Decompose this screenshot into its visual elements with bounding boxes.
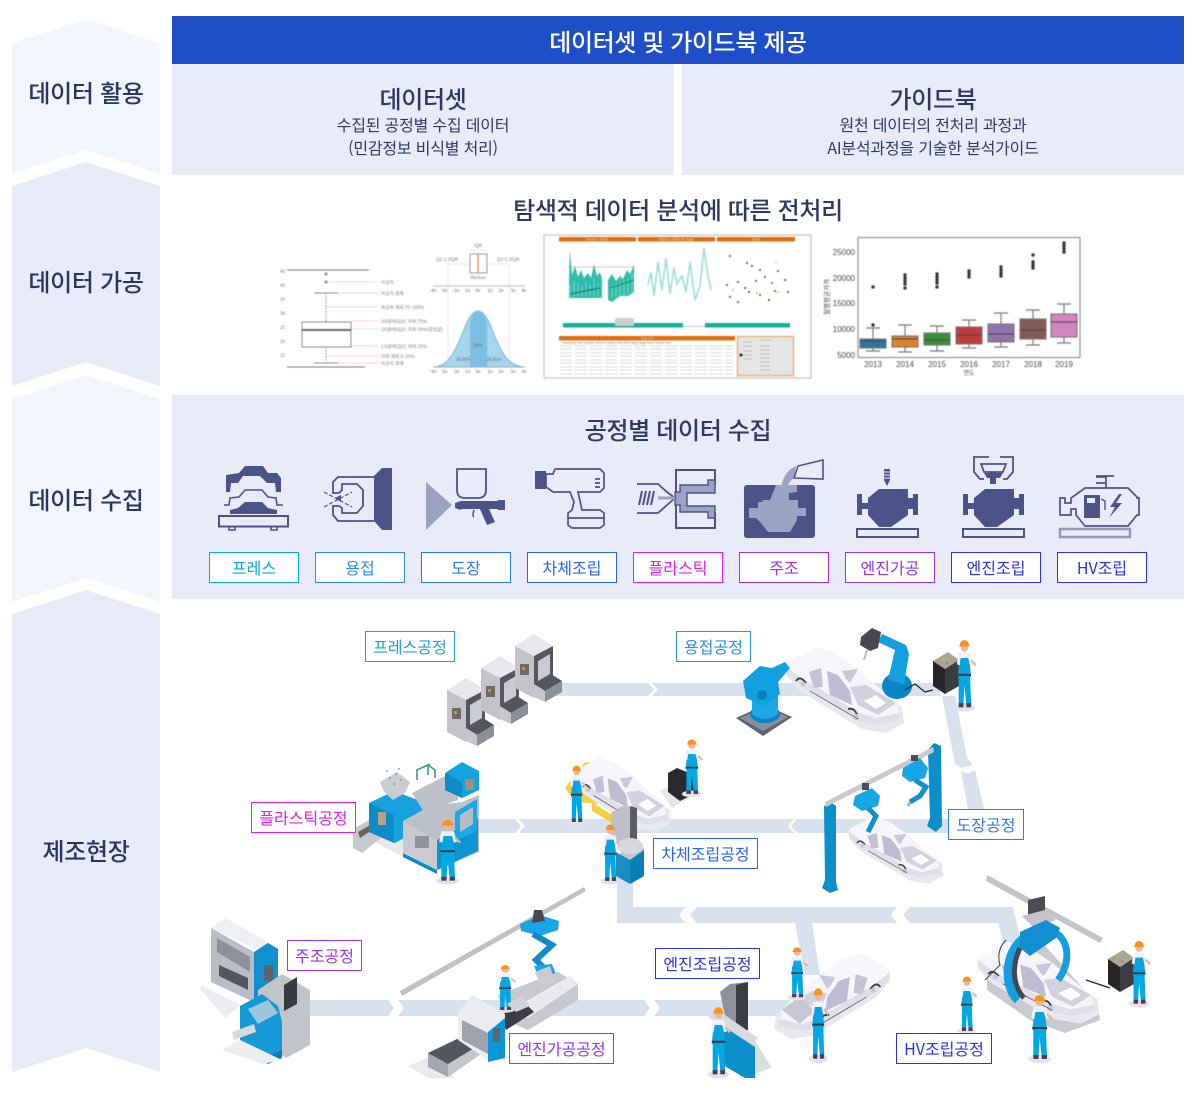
chart: box plot and normal distribution explanation: 하위 계위 0~25% xyxy=(381,353,416,360)
machine: painting gantry xyxy=(822,743,943,893)
panel: 데이터셋: 수집된 공정별 수집 데이터 xyxy=(337,112,509,136)
label: 용접 xyxy=(315,552,405,583)
step: 데이터 활용: 데이터 활용 xyxy=(28,74,144,109)
chart: box plot and normal distribution explanation: Median xyxy=(470,274,486,281)
label: 주조: 주조 xyxy=(769,555,799,579)
chart: box plot and normal distribution explanation: 2σ xyxy=(498,369,504,375)
chart: monitoring dashboard: Status xyxy=(752,237,761,241)
label: 플라스틱 xyxy=(633,552,723,583)
chart: box plot and normal distribution explanation: 24.65% xyxy=(486,357,502,363)
panel: 가이드북: AI분석과정을 기술한 분석가이드 xyxy=(827,135,1039,159)
label: 엔진가공공정: 엔진가공공정 xyxy=(517,1036,606,1060)
chart: yearly box plot xyxy=(822,236,1082,377)
icon: HV engine xyxy=(1060,476,1139,537)
chart: monitoring dashboard xyxy=(543,234,812,379)
machine: engine machining xyxy=(400,887,586,1078)
panel: 데이터셋: (민감정보 비식별 처리) xyxy=(348,135,498,159)
arrow row: painting to body assembly xyxy=(470,819,948,833)
icon: press xyxy=(219,466,288,530)
icon: engine assembly xyxy=(963,457,1024,537)
label: 프레스: 프레스 xyxy=(232,555,276,579)
label: 주조공정: 주조공정 xyxy=(295,943,354,967)
machine: injection molding xyxy=(353,762,479,884)
chart: box plot and normal distribution explanation: -2σ xyxy=(453,288,460,294)
heading: 공정별 데이터 수집: 공정별 데이터 수집 xyxy=(585,411,771,446)
step: 데이터 수집: 데이터 수집 xyxy=(28,481,144,516)
label: 엔진조립 xyxy=(951,552,1041,583)
chart: yearly box plot: 15000 xyxy=(833,299,856,308)
step: 데이터 가공: 데이터 가공 xyxy=(28,263,144,298)
chart: yearly box plot: 10000 xyxy=(833,325,856,334)
chart: yearly box plot: 2019 xyxy=(1055,360,1073,369)
chart: yearly box plot: 2017 xyxy=(992,360,1010,369)
chart: box plot and normal distribution explanation: 이상치 경계 xyxy=(381,290,403,297)
chart: box plot and normal distribution explanation: 15 xyxy=(280,353,286,359)
chart: box plot and normal distribution explanation: 24.65% xyxy=(455,357,471,363)
chart: monitoring dashboard: Vibration Status by Stage xyxy=(658,237,694,241)
chart: box plot and normal distribution explanation: -2σ xyxy=(453,369,460,375)
arrow row: press to welding xyxy=(556,683,940,696)
panel: 가이드북: 가이드북 xyxy=(890,80,976,115)
label: HV조립공정: HV조립공정 xyxy=(904,1036,984,1060)
chart: yearly box plot: 2015 xyxy=(928,360,946,369)
chart: box plot and normal distribution explanation: Q1-1.5IQR xyxy=(436,257,458,263)
arrow row: casting to engine xyxy=(300,1000,790,1016)
flow arrows xyxy=(300,683,1022,1016)
chart: box plot and normal distribution explanation: 40 xyxy=(280,283,286,289)
label: 차체조립공정 xyxy=(653,838,758,869)
machine: HV assembly xyxy=(958,875,1150,1063)
icons: process row xyxy=(218,456,1140,538)
chart: box plot and normal distribution explanation: 20 xyxy=(280,339,286,345)
header bar: 데이터셋 및 가이드북 제공 xyxy=(549,23,807,58)
chart: yearly box plot: 연도 xyxy=(963,369,975,377)
header bar xyxy=(172,16,1184,64)
chart: box plot and normal distribution explanation: 1σ xyxy=(487,288,493,294)
label: 엔진가공공정 xyxy=(509,1033,614,1064)
label: HV조립: HV조립 xyxy=(1077,555,1127,579)
label: 엔진가공 xyxy=(845,552,935,583)
chart: yearly box plot: 5000 xyxy=(837,351,856,360)
step: 제조현장 xyxy=(12,590,160,1072)
machine: center assembly xyxy=(601,805,644,884)
label: 차체조립 xyxy=(527,552,617,583)
chart: box plot and normal distribution explanation: 최상위 계위 75~100% xyxy=(381,304,425,311)
machine: welding station xyxy=(736,628,976,736)
step: 데이터 가공 xyxy=(12,162,160,386)
icon: casting xyxy=(744,460,823,538)
chart: box plot and normal distribution explanation: Q3+1.5IQR xyxy=(497,257,519,263)
chart: yearly box plot: 25000 xyxy=(833,248,856,257)
machine: engine assembly xyxy=(708,947,890,1079)
chart: box plot and normal distribution explanation: 1σ xyxy=(487,369,493,375)
chart: yearly box plot: 2018 xyxy=(1024,360,1042,369)
chart: box plot and normal distribution explanation: 4σ xyxy=(521,288,527,294)
chart: box plot and normal distribution explanation: 30 xyxy=(280,311,286,317)
chart: box plot and normal distribution explanation: 2사분위(Q2): 하위 50%(중앙값) xyxy=(381,326,443,333)
panel: 데이터셋: 데이터셋 xyxy=(380,80,466,115)
machine: press cabinets xyxy=(447,634,562,746)
panel: 가이드북: 원천 데이터의 전처리 과정과 xyxy=(839,112,1027,136)
label: 용접공정: 용접공정 xyxy=(684,634,743,658)
chart: box plot and normal distribution explanation: 이상치 xyxy=(381,279,394,286)
chart: box plot and normal distribution explanation: IQR xyxy=(474,243,482,249)
step: 제조현장: 제조현장 xyxy=(42,832,130,867)
label: HV조립공정 xyxy=(896,1033,992,1064)
label: 프레스공정 xyxy=(365,631,455,662)
chart: monitoring dashboard: Timestamp Item number Vehicle number Drive RMS Stage Stage Name Failure code xyxy=(562,341,672,345)
label: 프레스 xyxy=(209,552,299,583)
icon: welding xyxy=(324,468,392,530)
chart: yearly box plot: 2016 xyxy=(960,360,978,369)
chart: box plot and normal distribution explanation: 3사분위(Q3): 하위 75% xyxy=(381,318,428,325)
label: 도장: 도장 xyxy=(451,555,481,579)
chart: box plot and normal distribution explanation: 1사분위(Q1): 하위 25% xyxy=(381,343,428,350)
label: 도장 xyxy=(421,552,511,583)
chart: box plot and normal distribution explanation: 25 xyxy=(280,325,286,331)
arrow: welding to painting xyxy=(942,696,988,826)
label: 엔진가공: 엔진가공 xyxy=(861,555,919,579)
step: 데이터 수집 xyxy=(12,375,160,602)
chart: box plot and normal distribution explanation: -1σ xyxy=(464,288,471,294)
machine: casting xyxy=(201,918,310,1064)
icon: plastic injection xyxy=(637,470,715,528)
label: 도장공정: 도장공정 xyxy=(957,812,1015,836)
chart: monitoring dashboard: Vibration Status xyxy=(586,237,609,241)
chart: box plot and normal distribution explanation: -1σ xyxy=(464,369,471,375)
icon: spray gun xyxy=(426,469,505,530)
heading: 전처리: 탐색적 데이터 분석에 따른 전처리 xyxy=(513,191,843,226)
chart: box plot and normal distribution explanation: 35 xyxy=(280,297,286,303)
chart: box plot and normal distribution explanation: 48 xyxy=(280,269,286,275)
chart: box plot and normal distribution explanation xyxy=(280,242,527,375)
chart: box plot and normal distribution explanation: 0σ xyxy=(475,369,481,375)
icon: engine machining xyxy=(857,469,918,537)
label: 주조 xyxy=(739,552,829,583)
chart: box plot and normal distribution explanation: -3σ xyxy=(441,369,448,375)
chart: yearly box plot: 2014 xyxy=(896,360,914,369)
chart: box plot and normal distribution explanation: 3σ xyxy=(510,288,516,294)
machine: body assembly car xyxy=(565,740,703,832)
label: 용접: 용접 xyxy=(345,555,375,579)
chart: yearly box plot: 2013 xyxy=(864,360,882,369)
chart: box plot and normal distribution explanation: -4σ xyxy=(430,288,437,294)
chart: box plot and normal distribution explanation: 3σ xyxy=(510,369,516,375)
icon: drill xyxy=(535,469,604,528)
label: HV조립 xyxy=(1057,552,1147,583)
label: 차체조립공정: 차체조립공정 xyxy=(661,841,750,865)
label: 용접공정 xyxy=(676,631,751,662)
label: 차체조립: 차체조립 xyxy=(543,555,601,579)
chart: box plot and normal distribution explanation: 이상치 경계 xyxy=(381,360,403,367)
panel: 공정별 데이터 수집 xyxy=(172,395,1184,599)
chart: box plot and normal distribution explanation: 50% xyxy=(474,343,482,349)
chart: yearly box plot: 20000 xyxy=(833,274,856,283)
chart: box plot and normal distribution explanation: 2σ xyxy=(498,288,504,294)
chart: box plot and normal distribution explanation: 0σ xyxy=(475,288,481,294)
chart: monitoring dashboard: Data List xyxy=(641,336,654,340)
chart: box plot and normal distribution explanation: -3σ xyxy=(441,288,448,294)
label: 플라스틱공정: 플라스틱공정 xyxy=(259,805,348,829)
panel: 가이드북 xyxy=(682,64,1184,175)
label: 플라스틱: 플라스틱 xyxy=(649,555,707,579)
panel: 데이터셋 xyxy=(172,64,674,175)
chart: yearly box plot: 월별평균가격 xyxy=(822,279,831,315)
label: 주조공정 xyxy=(287,940,362,971)
label: 플라스틱공정 xyxy=(251,802,356,833)
label: 엔진조립공정: 엔진조립공정 xyxy=(663,951,752,975)
label: 프레스공정: 프레스공정 xyxy=(373,634,447,658)
chart: box plot and normal distribution explanation: 4σ xyxy=(521,369,527,375)
label: 엔진조립공정 xyxy=(655,948,760,979)
label: 도장공정 xyxy=(948,809,1024,840)
step: 데이터 활용 xyxy=(12,19,160,174)
arrow row: body assembly to HV xyxy=(617,875,1022,975)
chart: box plot and normal distribution explanation: -4σ xyxy=(430,369,437,375)
label: 엔진조립: 엔진조립 xyxy=(967,555,1025,579)
